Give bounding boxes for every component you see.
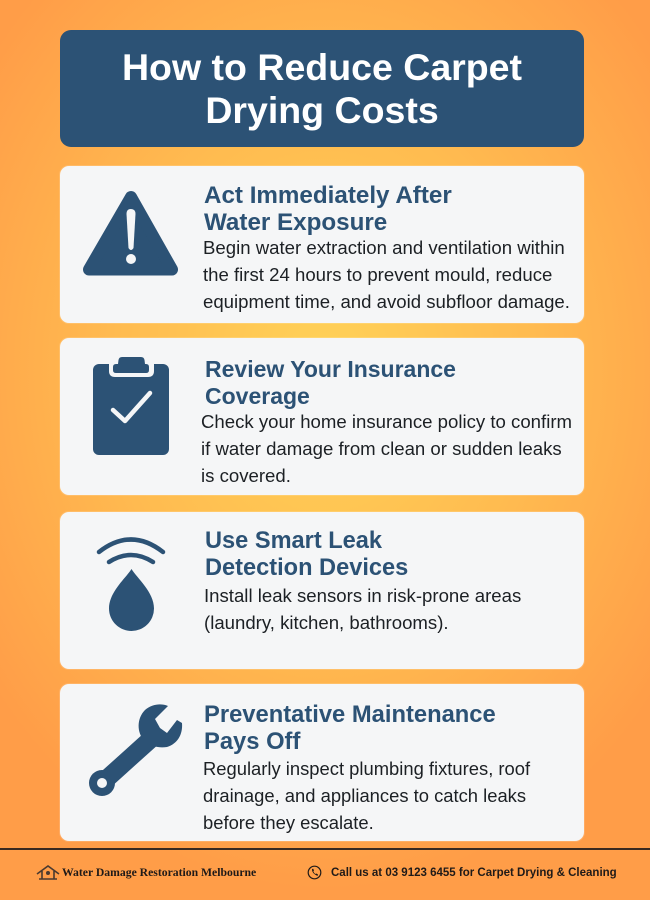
icon: warning triangle xyxy=(83,191,178,276)
body text: equipment time, and avoid subfloor damage. xyxy=(203,290,570,312)
heading: Water Exposure xyxy=(204,208,387,236)
icon: wrench xyxy=(89,704,182,796)
icon: clipboard check xyxy=(93,357,169,455)
heading: Preventative Maintenance xyxy=(204,700,496,728)
footer: phone call to action xyxy=(308,866,617,880)
company name: Water Damage Restoration Melbourne xyxy=(62,866,256,879)
body text: Check your home insurance policy to confirm xyxy=(201,410,572,432)
panel: insurance coverage xyxy=(60,338,584,495)
heading: Use Smart Leak xyxy=(205,528,382,554)
footer: company logo and name xyxy=(36,865,256,880)
body text xyxy=(203,236,570,312)
panel: act immediately xyxy=(60,166,584,323)
body text xyxy=(201,410,572,486)
body text: before they escalate. xyxy=(203,812,374,832)
heading xyxy=(205,528,408,580)
body text: Install leak sensors in risk-prone areas xyxy=(204,584,521,606)
body text: if water damage from clean or sudden leaks xyxy=(201,438,562,458)
body text xyxy=(203,758,530,833)
heading: Pays Off xyxy=(204,728,300,754)
icon: water drop with signal xyxy=(96,537,166,631)
icon: phone xyxy=(308,866,322,880)
heading xyxy=(205,356,456,409)
body text: Regularly inspect plumbing fixtures, roof xyxy=(203,758,530,778)
title banner: How to Reduce Carpet xyxy=(122,46,522,88)
heading: Coverage xyxy=(205,382,310,408)
body text xyxy=(204,584,521,633)
heading: Act Immediately After xyxy=(204,182,452,208)
body text: (laundry, kitchen, bathrooms). xyxy=(204,612,449,632)
title banner: Drying Costs xyxy=(205,89,439,131)
heading: Review Your Insurance xyxy=(205,356,456,382)
body text: Begin water extraction and ventilation within xyxy=(203,236,565,258)
body text: the first 24 hours to prevent mould, reduce xyxy=(203,264,552,284)
icon: house xyxy=(36,865,60,880)
heading xyxy=(204,182,452,236)
heading xyxy=(204,700,496,754)
body text: is covered. xyxy=(201,464,291,486)
divider line xyxy=(0,848,650,850)
title banner xyxy=(60,30,584,147)
phone text: Call us at 03 9123 6455 for Carpet Drying & Cleaning xyxy=(331,867,617,879)
panel: preventative maintenance xyxy=(60,684,584,841)
panel: leak detection xyxy=(60,512,584,669)
body text: drainage, and appliances to catch leaks xyxy=(203,784,526,806)
heading: Detection Devices xyxy=(205,554,408,580)
